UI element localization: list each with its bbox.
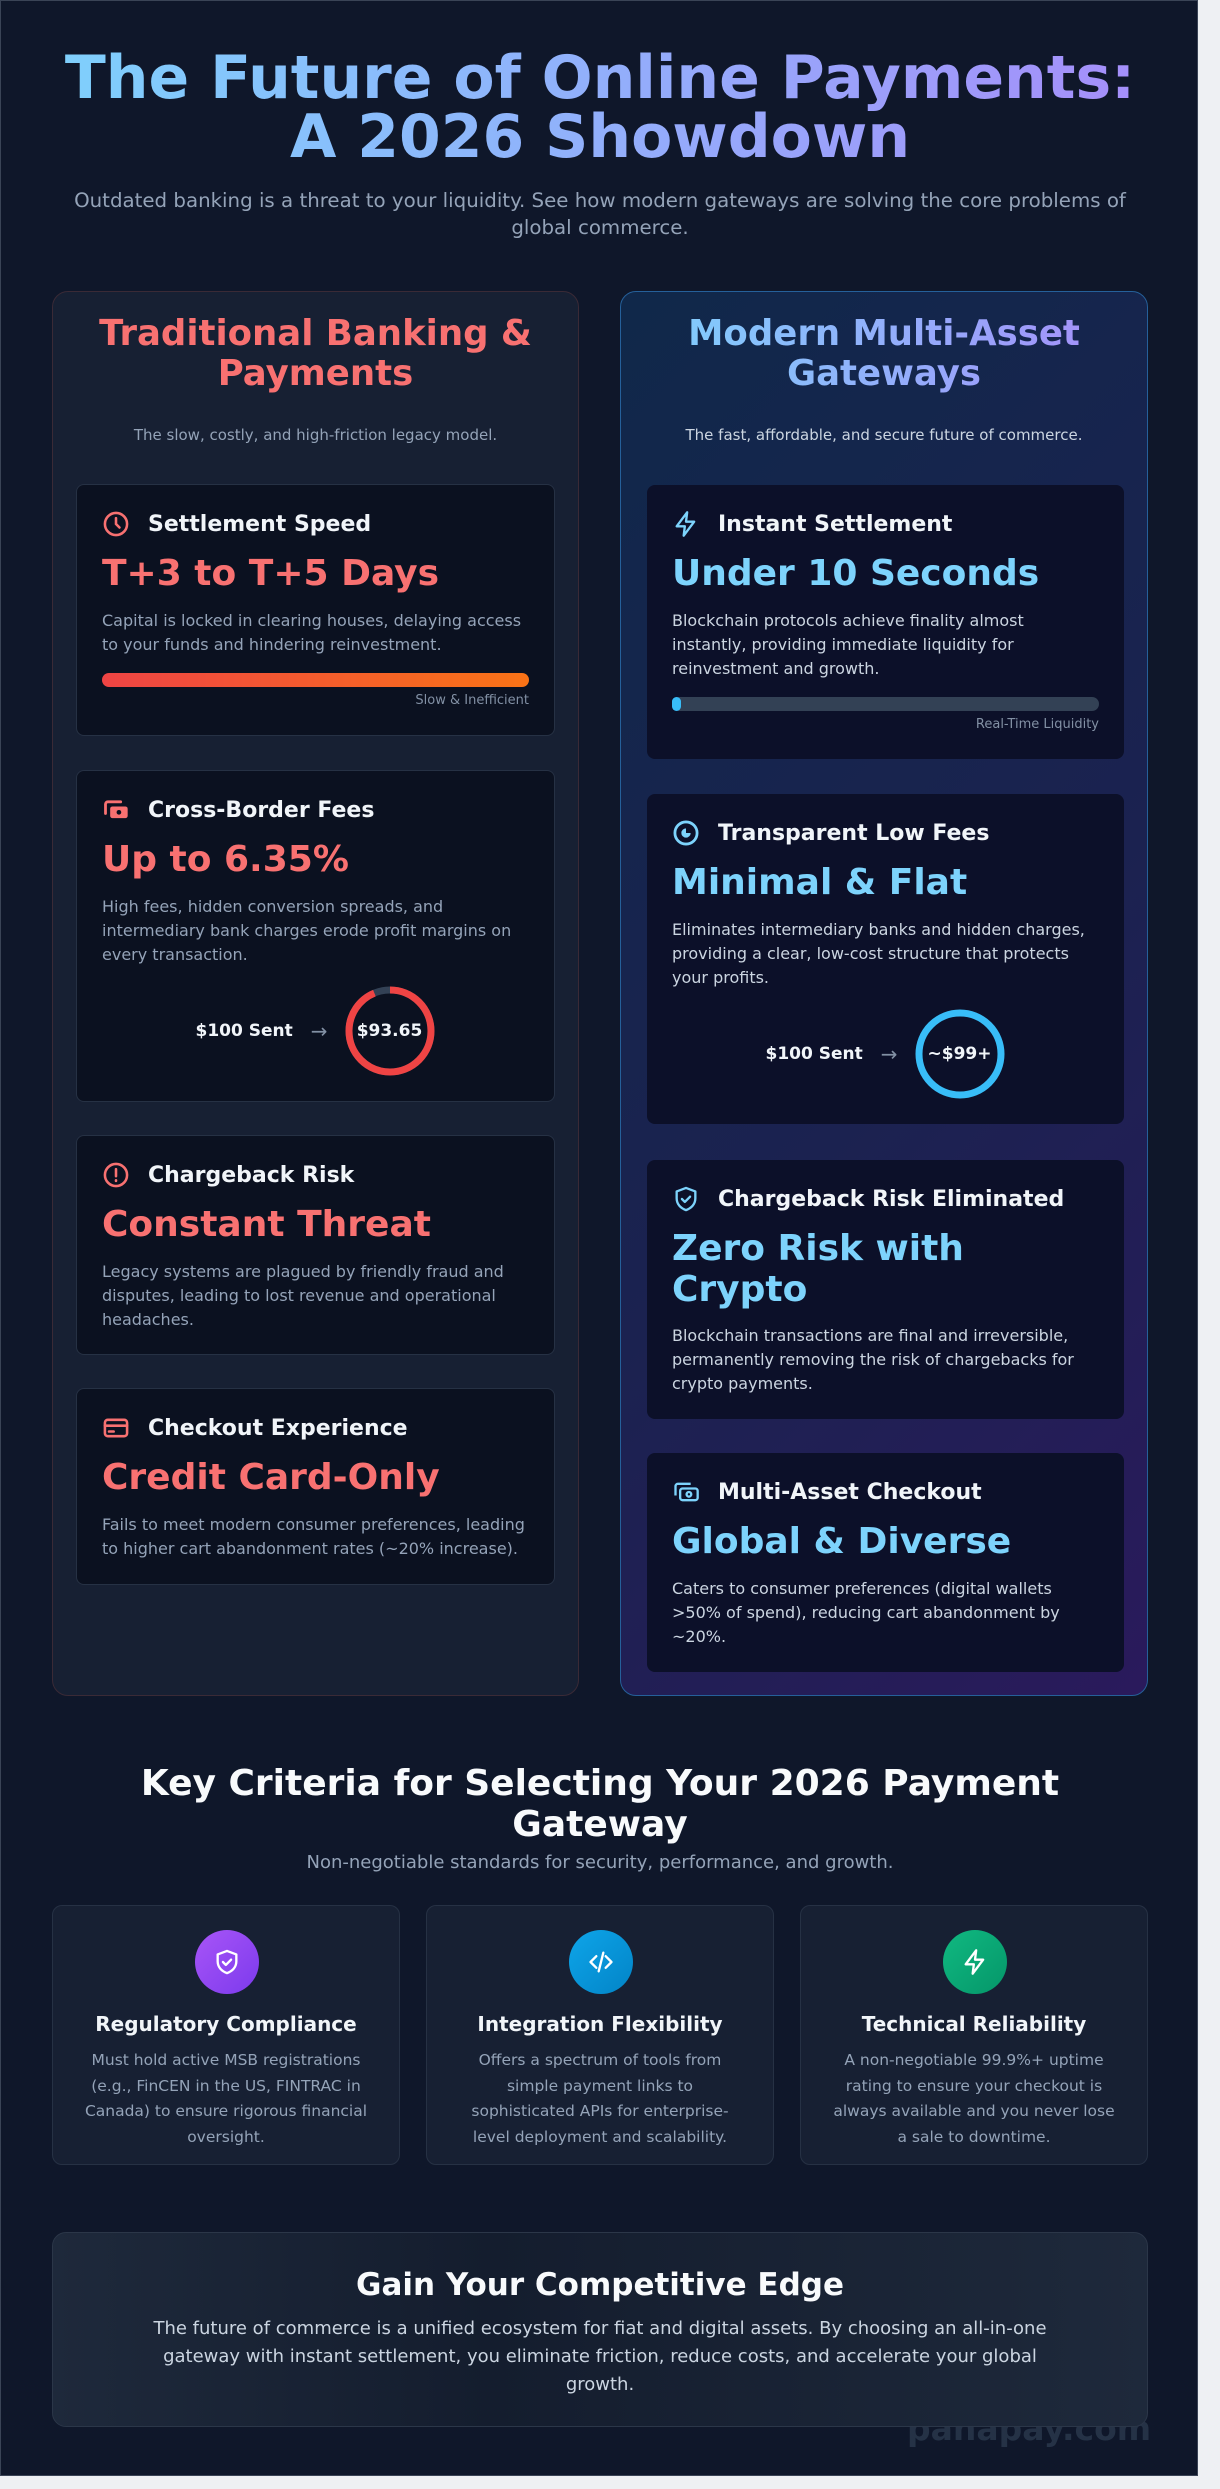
criteria card: regulatory compliance — [52, 1905, 400, 2165]
card title: cross-border fees: Cross-Border Fees — [148, 798, 374, 822]
card: chargeback eliminated: Blockchain transactions are final and irreversible, permanently removing the risk of chargebacks for crypto payments. — [672, 1326, 1074, 1393]
watermark: panapay.com — [907, 2409, 1151, 2448]
criteria card: technical reliability: Technical Reliability — [862, 2012, 1086, 2036]
card: chargeback risk: Constant Threat — [102, 1204, 431, 1245]
panel subtitle: modern: The fast, affordable, and secure future of commerce. — [686, 426, 1082, 444]
panel heading: traditional — [99, 313, 532, 394]
heading: key criteria: Key Criteria for Selecting Your 2026 Payment — [141, 1763, 1059, 1804]
card: checkout experience: Credit Card-Only — [102, 1457, 440, 1498]
panel heading: modern: Gateways — [787, 353, 981, 394]
card: chargeback eliminated — [647, 1160, 1124, 1419]
card title: low fees: Transparent Low Fees — [718, 820, 989, 846]
card: cross-border fees: High fees, hidden conversion spreads, and intermediary bank charges erode profit margins on every transaction. — [102, 897, 511, 964]
card: multi-asset checkout: Caters to consumer preferences (digital wallets >50% of spend), reducing cart abandonment by ~20%. — [672, 1579, 1060, 1646]
card: instant settlement: Under 10 Seconds — [672, 553, 1039, 594]
card: multi-asset checkout — [647, 1453, 1124, 1672]
panel: modern gateways — [620, 291, 1148, 1696]
card title: settlement speed: Settlement Speed — [148, 512, 371, 536]
donut: ~$99+ — [765, 1010, 1004, 1098]
card title: instant settlement: Instant Settlement — [718, 512, 952, 536]
icon: code — [569, 1930, 633, 1994]
criteria card: integration flexibility: Integration Flexibility — [477, 2012, 723, 2036]
criteria card: technical reliability — [800, 1905, 1148, 2165]
card: settlement speed: T+3 to T+5 Days — [102, 553, 439, 594]
progress bar: real-time — [672, 697, 1099, 711]
card: cross-border fees — [76, 770, 555, 1102]
panel: traditional banking — [52, 291, 579, 1696]
card: transparent low fees: Eliminates intermediary banks and hidden charges, providing a clear, low-cost structure that protects your profits. — [672, 920, 1085, 987]
criteria card: regulatory compliance: Must hold active MSB registrations (e.g., FinCEN in the US, FINTRAC in Canada) to ensure rigorous financial oversight. — [85, 2051, 367, 2146]
card: instant settlement: Real-Time Liquidity — [976, 717, 1099, 732]
donut: $93.65: → — [311, 1019, 328, 1043]
card title: chargeback risk: Chargeback Risk — [148, 1162, 354, 1188]
heading: key criteria: Gateway — [512, 1804, 688, 1845]
donut: $93.65: $93.65 — [357, 1021, 422, 1041]
panel heading: modern — [621, 314, 1147, 394]
card: transparent low fees — [647, 794, 1124, 1124]
donut: $93.65 — [195, 986, 434, 1076]
criteria card: integration flexibility — [426, 1905, 774, 2165]
card title: multi-asset checkout: Multi-Asset Checkout — [718, 1480, 982, 1504]
heading: key criteria — [141, 1763, 1059, 1845]
card: multi-asset checkout: Global & Diverse — [672, 1521, 1011, 1562]
card: settlement speed: Capital is locked in clearing houses, delaying access to your funds and hindering reinvestment. — [102, 611, 521, 654]
donut: ~$99+: → — [881, 1042, 898, 1066]
criteria card: regulatory compliance: Regulatory Compliance — [95, 2012, 357, 2036]
panel heading: traditional: Traditional Banking & — [99, 313, 532, 354]
title: A 2026 Showdown — [290, 102, 910, 172]
donut: $93.65: $100 Sent — [195, 1021, 293, 1041]
donut: ~$99+: $100 Sent — [765, 1044, 863, 1064]
card: checkout experience: Fails to meet modern consumer preferences, leading to higher cart abandonment rates (~20% increase). — [102, 1515, 525, 1558]
criteria card: integration flexibility: Offers a spectrum of tools from simple payment links to sophisticated APIs for enterprise-level deployment and scalability. — [471, 2051, 729, 2146]
progress bar: slow — [102, 673, 529, 687]
icon: shield — [195, 1930, 259, 1994]
card: transparent low fees: Minimal & Flat — [672, 862, 967, 903]
card: chargeback risk: Legacy systems are plagued by friendly fraud and disputes, leading to lost revenue and operational headaches. — [102, 1262, 504, 1329]
card: instant settlement — [647, 485, 1124, 759]
conclusion box: Gain Your Competitive Edge — [356, 2267, 844, 2303]
panel subtitle: traditional: The slow, costly, and high-friction legacy model. — [134, 426, 497, 444]
conclusion box — [52, 2232, 1148, 2427]
card: cross-border fees: Up to 6.35% — [102, 839, 349, 880]
subtitle: Outdated banking is a threat to your liquidity. See how modern gateways are solving the core problems of global commerce. — [74, 189, 1126, 239]
card: checkout experience — [76, 1388, 555, 1585]
card: instant settlement: Blockchain protocols achieve finality almost instantly, providing immediate liquidity for reinvestment and growth. — [672, 611, 1024, 678]
donut: ~$99+: ~$99+ — [928, 1044, 991, 1064]
subheading: key criteria: Non-negotiable standards for security, performance, and growth. — [306, 1852, 894, 1873]
conclusion box: The future of commerce is a unified ecosystem for fiat and digital assets. By choosing an all-in-one gateway with instant settlement, you eliminate friction, reduce costs, and accelerate your global growth. — [153, 2318, 1047, 2395]
panel heading: modern: Modern Multi-Asset — [688, 313, 1080, 354]
panel heading: traditional: Payments — [218, 353, 413, 394]
card: settlement speed: Slow & Inefficient — [415, 693, 529, 708]
card: settlement speed — [76, 484, 555, 736]
card title: checkout experience: Checkout Experience — [148, 1416, 408, 1440]
title: The Future of Online Payments: — [65, 43, 1135, 113]
criteria card: technical reliability: A non-negotiable 99.9%+ uptime rating to ensure your checkout is always available and you never lose a sale to downtime. — [833, 2051, 1115, 2146]
title — [1, 49, 1199, 167]
card: chargeback eliminated: Zero Risk with Crypto — [672, 1228, 964, 1310]
card title: chargeback eliminated: Chargeback Risk Eliminated — [718, 1186, 1064, 1212]
card: chargeback risk — [76, 1135, 555, 1355]
icon: bolt — [943, 1930, 1007, 1994]
